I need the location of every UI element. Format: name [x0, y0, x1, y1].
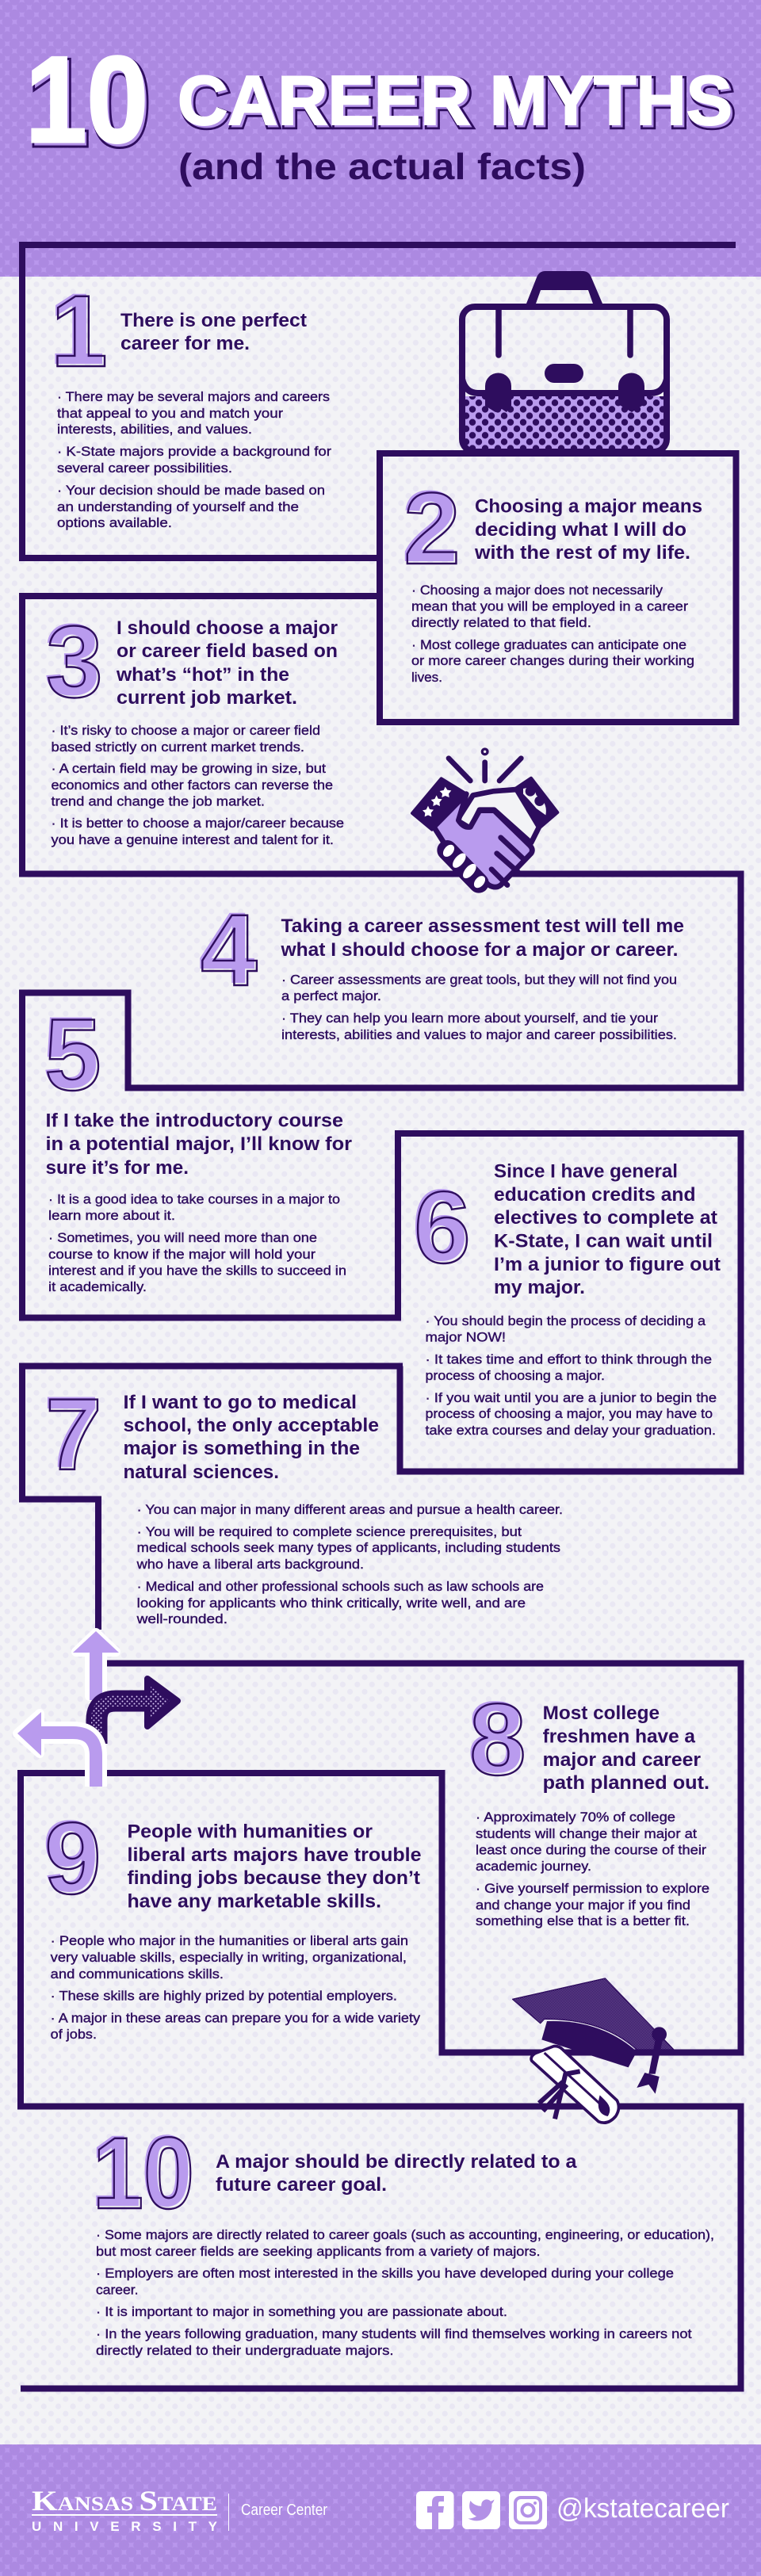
number 3: 3	[44, 603, 101, 717]
body 6: take extra courses and delay your graduation.	[425, 1423, 716, 1438]
heading 5: in a potential major, I’ll know for	[46, 1133, 352, 1155]
title number 10: 10	[28, 34, 151, 171]
number 4: 4	[201, 894, 258, 1007]
heading 4: what I should choose for a major or career.	[280, 939, 679, 961]
heading 9: liberal arts majors have trouble	[127, 1844, 422, 1866]
frame 7	[22, 1366, 403, 1630]
body 2: · Most college graduates can anticipate one	[411, 637, 686, 652]
body 8: students will change their major at	[476, 1826, 697, 1841]
icon: graduation cap and diploma	[513, 1978, 674, 2123]
heading 7: If I want to go to medical	[124, 1392, 357, 1413]
wordmark rule	[32, 2514, 217, 2516]
body 9: very valuable skills, especially in writing, organizational,	[51, 1950, 407, 1965]
number 5: 5	[44, 999, 101, 1112]
body 4	[281, 973, 677, 1042]
body 9: · A major in these areas can prepare you for a wide variety	[51, 2011, 421, 2026]
panel 1: one perfect career	[22, 245, 736, 558]
heading 6: Since I have general	[494, 1160, 678, 1183]
body 8: something else that is a better fit.	[476, 1913, 690, 1928]
panel 8: freshmen	[107, 1663, 740, 2053]
wordmark: KANSAS STATE	[32, 2485, 217, 2517]
sparks	[449, 751, 521, 781]
heading 5: sure it’s for me.	[46, 1157, 189, 1179]
cap base	[541, 2021, 637, 2067]
number 10: 10	[90, 2115, 192, 2228]
ribbon	[539, 2071, 580, 2119]
body 5: · It is a good idea to take courses in a major to	[48, 1192, 340, 1206]
number 9: 9	[44, 1802, 101, 1916]
heading 7: major is something in the	[124, 1438, 360, 1459]
diploma	[531, 2047, 618, 2123]
body 7: medical schools seek many types of applicants, including students	[137, 1540, 560, 1555]
number 10: 10	[93, 2117, 194, 2230]
right cuff	[515, 778, 557, 828]
body 1: several career possibilities.	[57, 461, 232, 476]
number 8: 8	[469, 1684, 526, 1797]
body 8	[476, 1810, 709, 1928]
number 1: 1	[48, 273, 105, 386]
panel 3: what's hot	[22, 596, 381, 873]
body 10: · Employers are often most interested in the skills you have developed during your college	[96, 2266, 674, 2281]
heading 8: major and career	[543, 1749, 701, 1771]
body 5: · Sometimes, you will need more than one	[48, 1230, 317, 1245]
body 8: least once during the course of their	[476, 1842, 706, 1858]
number 2: 2	[403, 472, 461, 586]
body 6: · It takes time and effort to think through the	[425, 1352, 712, 1366]
number 9: 9	[42, 1800, 99, 1913]
body 10	[96, 2227, 714, 2358]
panel 10: directly related major	[21, 2107, 740, 2389]
social icons and handle	[416, 2491, 729, 2529]
panel 4: career assessment	[19, 873, 740, 1087]
body 8: academic journey.	[476, 1859, 591, 1874]
body 6: process of choosing a major, you may have to	[425, 1406, 713, 1421]
body 1: options available.	[57, 515, 172, 530]
body 6: process of choosing a major.	[425, 1368, 605, 1383]
cap board	[513, 1978, 674, 2050]
heading 4: Taking a career assessment test will tell me	[281, 915, 684, 937]
body 7: · Medical and other professional schools such as law schools are	[137, 1579, 544, 1594]
heading 6: education credits and	[494, 1184, 696, 1206]
title words career myths: CAREER MYTHS	[180, 63, 735, 142]
frame 3	[22, 596, 381, 873]
body 3: economics and other factors can reverse the	[51, 778, 333, 793]
heading 3: current job market.	[117, 687, 297, 709]
number 3: 3	[46, 606, 103, 719]
heading 2	[474, 496, 702, 564]
body 2: or more career changes during their working	[411, 653, 694, 668]
icon: instagram	[509, 2491, 547, 2529]
heading 2: with the rest of my life.	[474, 542, 690, 564]
number 6: 6	[411, 1169, 468, 1282]
career center label: Career Center	[241, 2501, 327, 2519]
body 5: interest and if you have the skills to succeed in	[48, 1263, 346, 1278]
body 1: interests, abilities, and values.	[57, 422, 252, 437]
icon: briefcase	[462, 271, 667, 453]
body 4: a perfect major.	[281, 988, 381, 1003]
body 4: · They can help you learn more about yourself, and tie your	[281, 1011, 658, 1026]
thumb fingers	[447, 850, 479, 883]
title words career myths: CAREER MYTHS	[180, 63, 735, 142]
body 10: · In the years following graduation, many students will find themselves working in careers not	[96, 2326, 692, 2341]
body 4: · Career assessments are great tools, but they will not find you	[281, 973, 677, 988]
body 4: interests, abilities and values to major and career possibilities.	[281, 1027, 677, 1042]
heading 1: There is one perfect	[120, 310, 307, 331]
number 4: 4	[198, 892, 255, 1005]
footer band	[0, 2444, 761, 2576]
body 9: · These skills are highly prized by potential employers.	[51, 1989, 397, 2004]
body 9: of jobs.	[51, 2027, 97, 2042]
body 3: · A certain field may be growing in size, but	[51, 761, 326, 776]
body 6: · You should begin the process of deciding a	[425, 1313, 706, 1328]
heading 3	[116, 617, 338, 709]
number 6: 6	[414, 1171, 471, 1285]
body 3: you have a genuine interest and talent for it.	[51, 832, 334, 847]
title	[25, 31, 735, 187]
heading 7	[124, 1392, 379, 1483]
panel 2: choosing a major	[380, 453, 736, 722]
heading 8: path planned out.	[543, 1772, 709, 1794]
body 5: learn more about it.	[48, 1208, 175, 1223]
body 8: · Give yourself permission to explore	[476, 1881, 709, 1896]
title words career myths: CAREER MYTHS	[178, 61, 732, 140]
heading 7: school, the only acceptable	[124, 1415, 379, 1436]
number 7: 7	[45, 1378, 102, 1492]
heading 10	[216, 2151, 577, 2196]
body 1	[57, 389, 331, 530]
heading 6: electives to complete at	[494, 1207, 717, 1229]
body 1: · K-State majors provide a background for	[57, 444, 331, 459]
body 10: · It is important to major in something you are passionate about.	[96, 2304, 507, 2319]
icon: twitter	[462, 2491, 500, 2529]
heading 2: Choosing a major means	[475, 496, 702, 517]
tassel	[637, 2027, 667, 2094]
body 5: it academically.	[48, 1279, 147, 1294]
body 3: · It is better to choose a major/career because	[51, 816, 344, 831]
header band	[0, 0, 761, 277]
divider	[228, 2494, 229, 2531]
body 8: and change your major if you find	[476, 1898, 690, 1913]
body 7: · You will be required to complete science prerequisites, but	[137, 1524, 522, 1539]
heading 9: People with humanities or	[127, 1821, 373, 1842]
heading 8: freshmen have a	[543, 1726, 696, 1748]
heading 3: what’s “hot” in the	[116, 664, 289, 686]
body 5	[48, 1192, 346, 1294]
number 2: 2	[401, 470, 458, 583]
heading 6: my major.	[494, 1277, 585, 1298]
body 6: · If you wait until you are a junior to begin the	[425, 1390, 717, 1405]
university line: UNIVERSITY	[32, 2519, 218, 2534]
icon: handshake	[412, 751, 557, 890]
left arrow	[17, 1712, 96, 1787]
handle: @kstatecareer	[556, 2494, 729, 2524]
body 3: · It’s risky to choose a major or career field	[51, 723, 320, 738]
finger lines	[491, 838, 523, 885]
dark right arrow	[97, 1679, 178, 1744]
body 2: lives.	[411, 670, 442, 685]
heading 6: I’m a junior to figure out	[494, 1254, 721, 1275]
heading 1	[120, 310, 307, 354]
body 10: but most career fields are seeking applicants from a variety of majors.	[96, 2244, 541, 2259]
heading 9: have any marketable skills.	[127, 1891, 381, 1913]
sleeved purple hand	[434, 794, 532, 887]
heading 2: deciding what I will do	[475, 519, 686, 541]
up arrow	[73, 1631, 119, 1700]
heading 1: career for me.	[120, 333, 250, 354]
heading 8: Most college	[543, 1703, 660, 1724]
body 5: course to know if the major will hold your	[48, 1247, 315, 1262]
heading 5	[46, 1110, 352, 1179]
body 9	[51, 1933, 421, 2042]
body 2: mean that you will be employed in a career	[411, 599, 688, 613]
body 1: · There may be several majors and careers	[57, 389, 330, 404]
body 7	[136, 1502, 563, 1626]
frame 1	[22, 245, 736, 558]
body 1: · Your decision should be made based on	[57, 483, 325, 498]
heading 8	[543, 1703, 709, 1794]
body 10: · Some majors are directly related to career goals (such as accounting, engineering, or education),	[96, 2227, 714, 2242]
heading 5: If I take the introductory course	[46, 1110, 343, 1132]
body 3	[51, 723, 344, 847]
heading 10: A major should be directly related to a	[216, 2151, 577, 2173]
panel 7: medical school	[22, 1366, 563, 1630]
panel 5: introductory course	[22, 990, 398, 1317]
heading 3: I should choose a major	[117, 617, 338, 639]
title number 10: 10	[28, 34, 151, 171]
heading 7: natural sciences.	[124, 1462, 279, 1483]
number 7: 7	[43, 1376, 100, 1489]
number 5: 5	[42, 996, 99, 1110]
body 8: · Approximately 70% of college	[476, 1810, 675, 1825]
frame 6	[395, 1133, 740, 1471]
body 1: that appeal to you and match your	[57, 406, 283, 421]
icon: facebook	[416, 2491, 453, 2529]
heading 10: future career goal.	[216, 2174, 387, 2196]
body 2: · Choosing a major does not necessarily	[411, 583, 663, 598]
body 7: who have a liberal arts background.	[136, 1557, 364, 1572]
frame 9	[21, 1773, 515, 2107]
number 1: 1	[51, 275, 108, 388]
body 1: an understanding of yourself and the	[57, 499, 299, 514]
subtitle: (and the actual facts)	[178, 146, 586, 187]
title number 10: 10	[25, 31, 148, 168]
icon: direction arrows	[17, 1631, 178, 1787]
frame 2	[380, 453, 736, 722]
heading 4	[280, 915, 684, 961]
body 3: trend and change the job market.	[51, 794, 265, 809]
body 10: career.	[96, 2283, 138, 2298]
number 8: 8	[467, 1681, 524, 1794]
heading 9	[127, 1821, 422, 1913]
body 6: major NOW!	[425, 1330, 506, 1344]
heading 6: K-State, I can wait until	[494, 1231, 713, 1252]
body 2: directly related to that field.	[411, 615, 591, 630]
left cuff	[412, 778, 466, 830]
frame 4	[19, 873, 740, 1087]
body 3: based strictly on current market trends.	[51, 740, 304, 755]
heading 6	[494, 1160, 721, 1298]
body 10: directly related to their undergraduate majors.	[96, 2343, 394, 2358]
frame 8	[107, 1663, 740, 2053]
panel 6: general education credits	[395, 1133, 740, 1471]
frame 5	[22, 990, 398, 1317]
body 6	[425, 1313, 717, 1438]
heading 3: or career field based on	[117, 640, 338, 662]
body 7: · You can major in many different areas and pursue a health career.	[137, 1502, 563, 1517]
body 9: · People who major in the humanities or liberal arts gain	[51, 1933, 408, 1948]
right hand outline	[457, 789, 539, 843]
body 7: looking for applicants who think critically, write well, and are	[137, 1596, 526, 1611]
body 7: well-rounded.	[136, 1611, 228, 1626]
body 9: and communications skills.	[51, 1966, 224, 1982]
footer logo: Kansas State University	[32, 2485, 327, 2534]
frame 10	[21, 2107, 740, 2389]
panel 9: humanities	[21, 1773, 515, 2107]
heading 9: finding jobs because they don’t	[127, 1867, 420, 1889]
body 2	[411, 583, 694, 685]
